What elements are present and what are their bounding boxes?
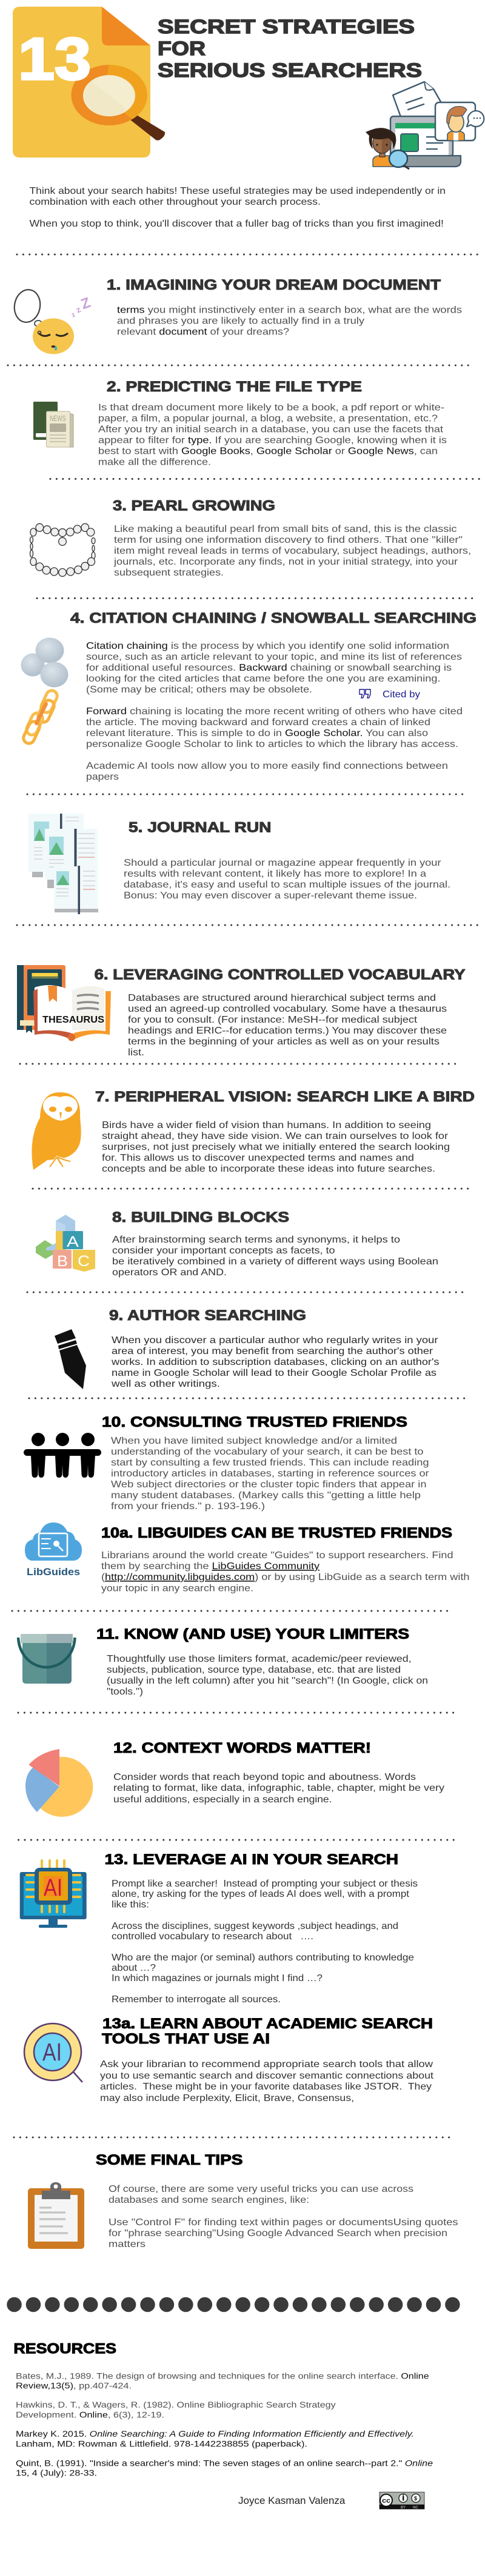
text block: 13: controlled vocabulary to research about …. <box>112 1931 313 1942</box>
icon: bucket <box>18 1634 75 1684</box>
icon: creative commons badge: $ <box>414 2495 417 2501</box>
heading: final tips: SOME FINAL TIPS <box>96 2153 242 2168</box>
reference list: Lanham, MD: Rowman & Littlefield. 978-1442238855 (paperback). <box>16 2439 307 2449</box>
icon: pie chart <box>25 1749 93 1817</box>
icon: alphabet blocks <box>36 1215 95 1272</box>
text block: 4: Academic AI tools now allow you to more easily find connections between <box>86 761 448 771</box>
text block: 13a: you to use semantic search and discover semantic connections about <box>100 2071 434 2081</box>
icon: document with 13 and magnifier: 13 <box>18 25 91 92</box>
title: SERIOUS SEARCHERS <box>158 59 422 81</box>
icon: pearl necklace <box>30 523 95 577</box>
text block: final tips: databases and some search engines, like: <box>109 2195 309 2205</box>
heading: 13a <box>102 2016 433 2047</box>
panel: strategy 10 trusted friends <box>24 1415 429 1512</box>
text block: 10a: Librarians around the world create "Guides" to support researchers. Find <box>101 1550 453 1561</box>
icon: clipboard <box>28 2182 84 2249</box>
icon: creative commons badge: cc <box>382 2497 390 2505</box>
panel: strategy 11 limiters <box>18 1627 428 1697</box>
text block: 11: "tools.") <box>107 1687 143 1697</box>
text block: 1: and phrases you are likely to actually find in a truly <box>117 316 364 326</box>
icon: owl <box>32 1092 81 1170</box>
title: FOR <box>158 38 206 59</box>
text block: 3 <box>113 524 471 578</box>
text block: 7 <box>102 1120 450 1174</box>
heading: 3: 3. PEARL GROWING <box>113 498 275 514</box>
text block: 5: Bonus: You may even discover a super-relevant theme issue. <box>124 891 417 901</box>
text block: 2: best to start with Google Books , Google Scholar or Google News , can <box>98 446 438 457</box>
text block: 13a: may also include Perplexity, Elicit, Brave, Consensus, <box>100 2093 354 2103</box>
title: SECRET STRATEGIES <box>158 16 415 38</box>
heading: resources: RESOURCES <box>13 2341 116 2357</box>
reference list: Markey K. 2015. Online Searching: A Guide to Finding Information Efficiently and Effectively. <box>16 2429 414 2438</box>
icon: book and newspaper <box>33 402 73 447</box>
text block: 6: headings and ERIC--for education terms.) You may discover these <box>128 1026 447 1036</box>
text block: 11 <box>107 1654 428 1697</box>
intro text: Think about your search habits! These useful strategies may be used independently or in <box>29 186 446 196</box>
text block: 5: Should a particular journal or magazine appear frequently in your <box>124 858 441 868</box>
text block: 4: the article. The moving backward and forward creates a chain of linked <box>86 717 430 728</box>
text block: 9: well as other writings. <box>111 1379 220 1389</box>
intro text: When you stop to think, you'll discover that a fuller bag of tricks than you first imagined! <box>29 219 444 229</box>
panel: strategy 4 citation chaining <box>21 611 477 782</box>
text block: 11: Thoughtfully use those limiters format, academic/peer reviewed, <box>107 1654 412 1664</box>
panel: strategy 10a libguides <box>25 1522 469 1593</box>
text block: 4: Forward chaining is locating the more recent writing of others who have cited <box>86 706 463 717</box>
icon: creative commons badge: NC <box>413 2506 418 2509</box>
text block: 1 <box>117 305 462 337</box>
text block: 3: Like making a beautiful pearl from small bits of sand, this is the classic <box>114 524 457 534</box>
text block: 2: After you try an initial search in a database, you can use the facets that <box>98 424 444 435</box>
icon: alphabet blocks: B <box>57 1253 68 1270</box>
text block: 9: area of interest, you may benefit from searching the author's other <box>112 1346 433 1356</box>
text block: 8: consider your important concepts as facets, to <box>112 1246 335 1256</box>
text block: 13: Across the disciplines, suggest keywords ,subject headings, and <box>112 1921 398 1931</box>
text block: 13: Remember to interrogate all sources. <box>112 1994 281 2005</box>
icon: people searching on laptop <box>366 82 484 169</box>
text block: 12: useful additions, especially in a search engine. <box>113 1794 332 1805</box>
text block: 13a: articles. These might be in your favorite databases like JSTOR. They <box>100 2082 432 2092</box>
panel: strategy 3 pearl growing <box>30 498 471 578</box>
text block: 12 <box>113 1772 444 1805</box>
text block: 10: introductory articles in databases, starting in reference sources or <box>111 1469 429 1479</box>
text block: 3: item might reveal leads in terms of vocabulary, subject headings, authors, <box>114 546 471 556</box>
text block: 1: terms you might instinctively enter in a search box, what are the words <box>117 305 462 315</box>
text block: 5 <box>124 858 450 901</box>
text block: 13: like this: <box>112 1900 149 1910</box>
icon: creative commons badge <box>380 2492 424 2509</box>
text block: final tips: matters <box>109 2239 146 2249</box>
heading: 5: 5. JOURNAL RUN <box>129 820 272 836</box>
text block: 2 <box>98 402 447 468</box>
text block: 6: terms in the beginning of your articles as well as on your results <box>128 1037 440 1047</box>
text block: 3: term for using one information discovery to find others. That one "killer" <box>114 535 463 545</box>
text block: 10: many student databases. (Markey calls this "getting a little help <box>111 1490 421 1501</box>
text block: 4: looking for the cited articles that came before the one you are examining. <box>86 674 440 684</box>
text block: 11: (usually in the left column) after you hit "search"! (In Google, click on <box>107 1676 428 1686</box>
icon: sleeping face with thought bubble: z <box>75 304 82 315</box>
heading: 2: 2. PREDICTING THE FILE TYPE <box>107 379 362 395</box>
text block: 2: appear to filter for type. If you are searching Google, knowing when it is <box>98 435 447 446</box>
intro text: combination with each other throughout your search process. <box>29 197 321 207</box>
text block: final tips: for "phrase searching"Using Google Advanced Search when precision <box>109 2228 447 2239</box>
text block: 7: for. This allows us to discover unexpected terms and names and <box>102 1153 414 1163</box>
icon: three friends <box>24 1433 101 1478</box>
text block: 8: be iteratively combined in a variety of different ways using Boolean <box>112 1256 438 1267</box>
text block: 8: operators OR and AND. <box>112 1267 227 1278</box>
text block: 8 <box>112 1235 438 1278</box>
heading: 6: 6. LEVERAGING CONTROLLED VOCABULARY <box>95 968 466 983</box>
icon: sleeping face with thought bubble: z <box>70 311 77 319</box>
icon: chain links <box>22 689 59 745</box>
text block: 7: Birds have a wider field of vision than humans. In addition to seeing <box>102 1120 431 1130</box>
reference list: Development. Online , 6(3), 12-19. <box>16 2410 164 2420</box>
heading: 8: 8. BUILDING BLOCKS <box>112 1210 289 1226</box>
heading: 4: 4. CITATION CHAINING / SNOWBALL SEARCHING <box>70 611 477 626</box>
icon: AI magnifier <box>24 2023 82 2082</box>
icon: alphabet blocks: C <box>78 1253 90 1270</box>
text block: 11: subjects, publication, source type, database, etc. that are listed <box>107 1665 401 1675</box>
text block: 7: surprises, not just precisely what we initially entered the search looking <box>102 1142 450 1152</box>
text block: 9 <box>111 1335 439 1389</box>
reference list: Quint, B. (1991). "Inside a searcher's mind: The seven stages of an online search--part 2." Online <box>16 2458 433 2468</box>
heading: 12: 12. CONTEXT WORDS MATTER! <box>113 1741 371 1756</box>
icon: book and newspaper: NEWS <box>50 414 66 423</box>
text block: 9: name in Google Scholar will lead to their Google Scholar Profile as <box>112 1368 436 1378</box>
reference list: Bates, M.J., 1989. The design of browsing and techniques for the online search interface. Online <box>16 2371 429 2381</box>
text block: 12: relating to format, like data, infographic, table, chapter, might be very <box>113 1783 444 1793</box>
heading: 11: 11. KNOW (AND USE) YOUR LIMITERS <box>96 1627 409 1642</box>
text block: 6 <box>128 993 447 1058</box>
text block: 6: used an agreed-up controlled vocabulary. Some have a thesaurus <box>128 1004 447 1014</box>
icon: libguides logo <box>25 1522 82 1578</box>
panel: strategy 6 controlled vocabulary <box>17 965 466 1058</box>
text block: 5: database, it's easy and useful to scan multiple issues of the journal. <box>124 880 450 890</box>
text block: 9: works. In addition to subscription databases, clicking on an author's <box>111 1357 440 1367</box>
panel: strategy 5 journal run <box>28 814 450 914</box>
icon: document with 13 and magnifier <box>13 7 165 158</box>
text block: 4: relevant literature. This is simple to do in Google Scholar. You can also <box>86 728 428 739</box>
text block: 4: Citation chaining is the process by which you identify one solid information <box>86 641 449 651</box>
text block: 8: After brainstorming search terms and synonyms, it helps to <box>112 1235 400 1245</box>
reference list <box>16 2371 433 2478</box>
panel: strategy 2 file type <box>33 379 447 468</box>
heading: 7: 7. PERIPHERAL VISION: SEARCH LIKE A BIRD <box>95 1089 475 1105</box>
text block: 10 <box>111 1436 429 1512</box>
text block: 10: Web subject directories or the cluster topic finders that appear in <box>111 1479 427 1490</box>
icon: sleeping face with thought bubble <box>12 288 93 354</box>
text block: 10a <box>101 1550 469 1593</box>
panel: strategy 8 building blocks <box>36 1210 438 1278</box>
panel: strategy 12 context words <box>25 1741 444 1817</box>
heading: 13a: TOOLS THAT USE AI <box>102 2031 270 2047</box>
heading: 13a: 13a. LEARN ABOUT ACADEMIC SEARCH <box>102 2016 433 2032</box>
text block: 10: from your friends." p. 193-196.) <box>111 1501 265 1512</box>
icon: thesaurus books: THESAURUS <box>42 1015 104 1025</box>
text block: 4: personalize Google Scholar to link to articles to which the library has access. <box>86 739 458 749</box>
author credit: Joyce Kasman Valenza <box>238 2495 346 2506</box>
reference list: Review,13(5) , pp.407-424. <box>16 2381 132 2391</box>
text block: 10a: your topic in any search engine. <box>101 1584 253 1593</box>
heading: 10: 10. CONSULTING TRUSTED FRIENDS <box>102 1415 407 1430</box>
text block: 5: results with relevant content, it likely has more to explore! In a <box>124 869 426 879</box>
heading: 1: 1. IMAGINING YOUR DREAM DOCUMENT <box>107 277 441 293</box>
icon: creative commons badge: BY <box>401 2506 406 2509</box>
text block: 4: source, such as an article relevant to your topic, and mine its list of references <box>86 652 462 662</box>
text block: 13: Prompt like a searcher! Instead of prompting your subject or thesis <box>112 1879 418 1889</box>
text block: final tips: Use "Control F" for finding text within pages or documentsUsing quotes <box>109 2217 458 2228</box>
text block: 2: make all the difference. <box>98 457 211 468</box>
panel: resources <box>13 2341 433 2509</box>
panel: strategy 13 leverage AI <box>20 1852 418 2005</box>
text block: 4: papers <box>86 772 119 782</box>
text block: 3: journals, etc. Incorporate any finds, not in your initial strategy, into your <box>113 557 458 567</box>
cited by link <box>360 689 420 700</box>
text block: 9: When you discover a particular author who regularly writes in your <box>112 1335 438 1346</box>
text block: 13 <box>112 1879 418 2005</box>
text block: 13: alone, try asking for the types of leads AI does well, with a prompt <box>112 1889 410 1899</box>
text block: 13a: Ask your librarian to recommend appropriate search tools that allow <box>100 2059 433 2070</box>
icon: libguides logo: LibGuides <box>27 1566 80 1578</box>
icon: AI chip on monitor <box>20 1861 87 1928</box>
text block: 2: Is that dream document more likely to be a book, a pdf report or white- <box>98 402 444 413</box>
panel: final tips <box>28 2153 458 2249</box>
text block: 4: (Some may be critical; others may be obsolete. <box>86 685 312 695</box>
text block: final tips: Of course, there are some very useful tricks you can use across <box>109 2184 413 2194</box>
heading: 13: 13. LEVERAGE AI IN YOUR SEARCH <box>104 1852 398 1868</box>
reference list: Hawkins, D. T., & Wagers, R. (1982). Online Bibliographic Search Strategy <box>16 2400 336 2409</box>
text block: 10: understanding of the vocabulary of your search, it can be best to <box>111 1447 424 1457</box>
cited by link: Cited by <box>383 689 420 700</box>
panel: strategy 1 dream document <box>12 277 462 354</box>
text block: 1: relevant document of your dreams? <box>117 327 289 337</box>
text block: 10: start by consulting a few trusted friends. This can include reading <box>111 1458 429 1468</box>
text block: 13: about …? <box>112 1963 156 1973</box>
text block: 7: straight ahead, they have side vision. We can train ourselves to look for <box>102 1131 449 1141</box>
text block: 4: for additional useful resources. Backward chaining or snowball searching is <box>86 663 452 673</box>
reference list: 15, 4 (July): 28-33. <box>16 2468 97 2478</box>
text block: 7: concepts and be able to incorporate these ideas into future searches. <box>102 1164 435 1174</box>
icon: snowballs <box>21 637 68 687</box>
icon: AI chip on monitor: AI <box>44 1874 62 1901</box>
text block: 6: Databases are structured around hierarchical subject terms and <box>128 993 436 1003</box>
header <box>13 7 484 169</box>
heading: 10a: 10a. LIBGUIDES CAN BE TRUSTED FRIENDS <box>101 1525 452 1541</box>
text block: final tips <box>109 2184 458 2249</box>
icon: fountain pen nib <box>55 1329 86 1389</box>
icon: AI magnifier: AI <box>42 2038 62 2066</box>
heading: 9: 9. AUTHOR SEARCHING <box>109 1308 306 1324</box>
text block: 4 <box>86 641 463 782</box>
text block: 6: for you to consult. (For instance: MeSH--for medical subject <box>128 1015 418 1025</box>
icon: alphabet blocks: A <box>67 1233 79 1250</box>
panel: strategy 9 author searching <box>55 1308 439 1389</box>
icon: thesaurus books <box>17 965 111 1041</box>
text block: 10: When you have limited subject knowledge and/or a limited <box>111 1436 397 1446</box>
intro text <box>29 186 446 229</box>
icon: sleeping face with thought bubble: Z <box>79 294 93 313</box>
text block: 10a: them by searching the LibGuides Community <box>101 1561 319 1572</box>
text block: 13: Who are the major (or seminal) authors contributing to knowledge <box>112 1953 414 1963</box>
panel: strategy 13a academic AI tools <box>24 2016 434 2103</box>
icon: stack of journals <box>28 814 98 914</box>
text block: 2: paper, a film, a popular journal, a blog, a website, a presentation, etc.? <box>98 413 438 424</box>
text block: 13a <box>100 2059 434 2103</box>
panel: strategy 7 peripheral vision <box>32 1089 475 1174</box>
text block: 10a: (http://community.libguides.com ) or by using LibGuide as a search term with <box>101 1572 469 1582</box>
text block: 13: In which magazines or journals might I find …? <box>112 1973 323 1983</box>
text block: 3: subsequent strategies. <box>114 568 224 578</box>
text block: 6: list. <box>128 1047 144 1058</box>
text block: 12: Consider words that reach beyond topic and aboutness. Words <box>113 1772 416 1782</box>
title <box>158 16 422 81</box>
